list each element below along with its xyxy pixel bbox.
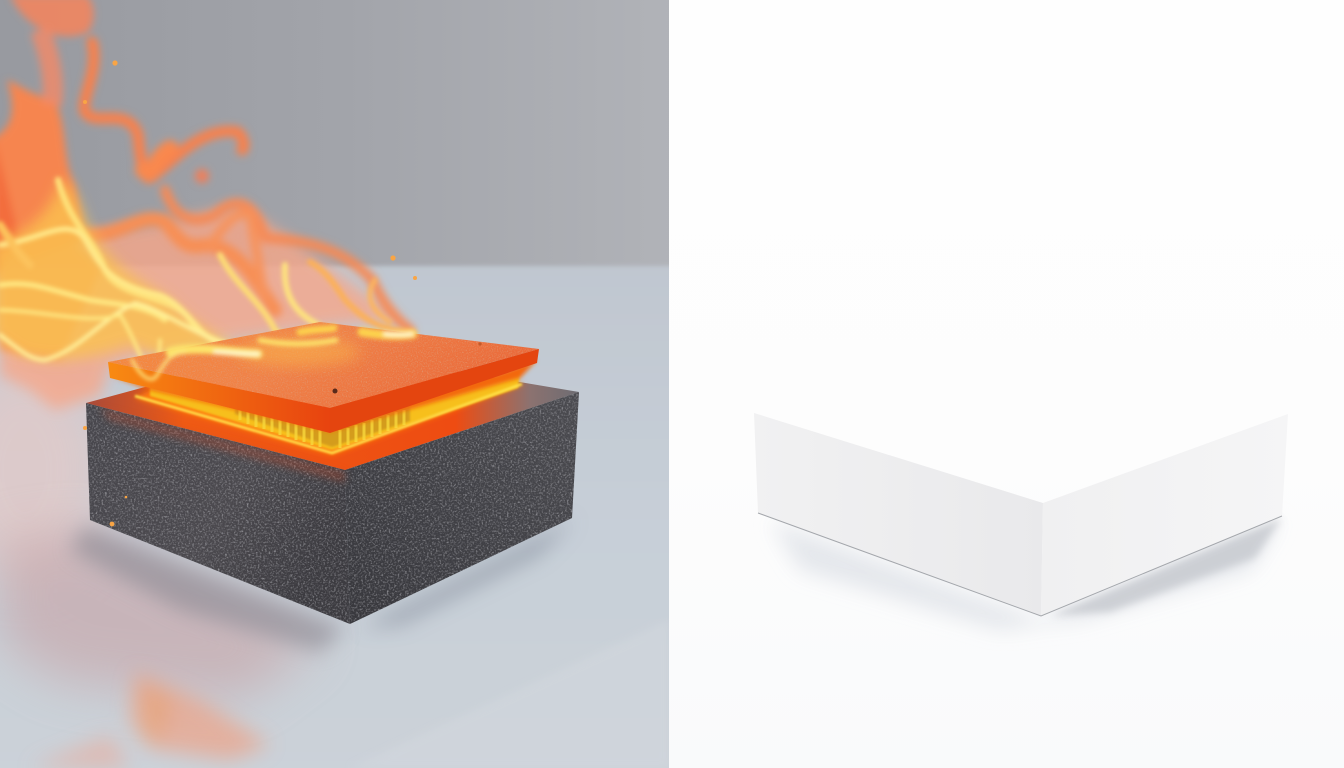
glowing honeycomb layer (110, 360, 537, 455)
flame pale halo (0, 205, 400, 410)
lighter floor corner (350, 620, 669, 768)
white block shadow (770, 518, 1282, 630)
white block left face (754, 413, 1043, 616)
block texture (86, 392, 579, 624)
background wall (0, 0, 700, 280)
flame tongues on plate (170, 349, 258, 354)
honeycomb band (150, 372, 520, 450)
panel: white block (669, 0, 1344, 768)
block shadow left (70, 526, 345, 652)
block left face (86, 403, 350, 624)
plate holes (332, 388, 338, 394)
panel: burning block (0, 0, 700, 768)
white background (669, 0, 1344, 768)
white block bottom edge (758, 513, 1282, 616)
sparks (83, 60, 417, 526)
base block (86, 345, 579, 624)
floor red haze (0, 530, 320, 700)
floor warm glow (0, 371, 92, 570)
orange plate (108, 322, 539, 433)
plate glow (240, 338, 360, 366)
warm fill under plate (110, 360, 537, 432)
block top surface (86, 372, 578, 470)
contact shadow (1050, 518, 1282, 616)
flame reflection on floor (30, 672, 270, 768)
flame over plate (132, 328, 413, 379)
bright lower line (135, 384, 522, 453)
floor (0, 266, 700, 768)
block shadow right (372, 524, 565, 633)
plate top (108, 322, 539, 408)
flame yellow body (0, 178, 240, 360)
plate right edge (330, 349, 539, 433)
heat on top edge (100, 408, 345, 482)
white block right face (1041, 414, 1288, 616)
plate left edge (108, 362, 330, 433)
flame bright strands (0, 180, 412, 380)
flame orange body (0, 0, 410, 360)
honeycomb cells (234, 408, 411, 448)
block right face (345, 392, 579, 624)
glow halo (135, 380, 524, 455)
